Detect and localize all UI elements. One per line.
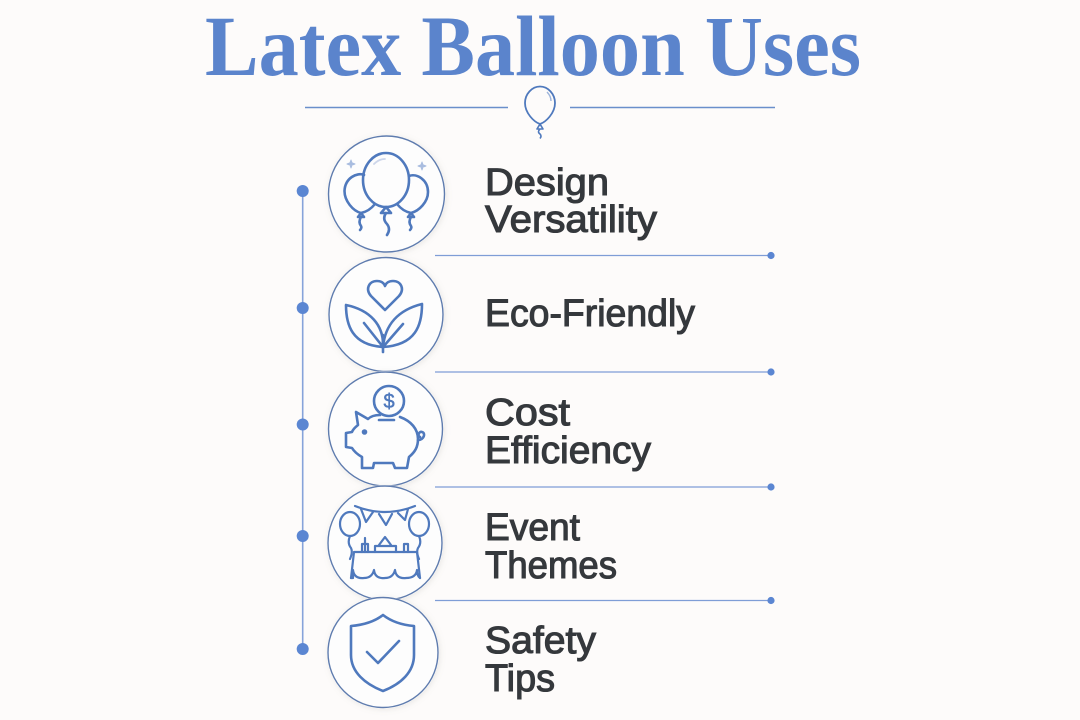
icon: plant with heart [346, 281, 422, 352]
label [485, 507, 617, 587]
label [485, 392, 651, 472]
label: Design [485, 162, 609, 204]
label: Eco-Friendly [485, 293, 695, 335]
label: Safety [485, 620, 596, 662]
title divider with balloon icon [305, 86, 775, 138]
icon: shield with check [351, 615, 414, 691]
panel: design versatility [328, 135, 657, 253]
icon: three balloons [344, 153, 428, 235]
label [485, 162, 657, 241]
panel: cost efficiency [328, 371, 651, 487]
label: Cost [485, 392, 570, 434]
icon: party table [340, 506, 429, 578]
label: Efficiency [485, 430, 651, 472]
label: Versatility [485, 199, 657, 241]
row separators [435, 252, 775, 604]
label: Themes [485, 545, 617, 587]
title: Latex Balloon Uses [205, 0, 861, 94]
label [485, 620, 596, 700]
icon: piggy bank with coin [346, 386, 424, 468]
label: Tips [485, 658, 555, 700]
icon: piggy bank with coin: $ [383, 391, 395, 413]
timeline [297, 185, 309, 655]
panel: event themes [327, 485, 617, 601]
panel: safety tips [327, 596, 596, 708]
label: Event [485, 507, 580, 549]
panel: eco-friendly [328, 256, 695, 372]
